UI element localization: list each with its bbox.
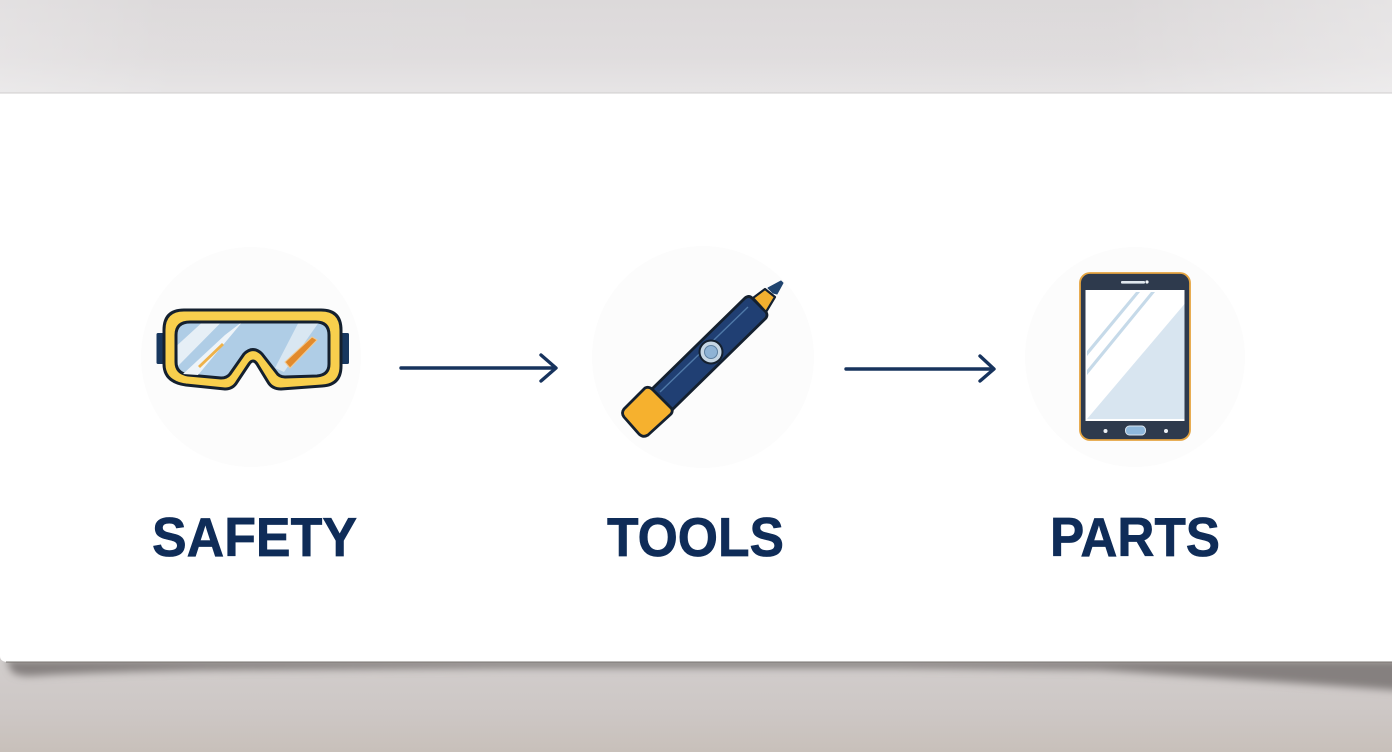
icon backdrop: safety xyxy=(141,247,361,467)
arrow: safety to tools xyxy=(401,355,556,381)
arrow: tools to parts xyxy=(846,356,994,381)
panel: white card xyxy=(0,93,1392,662)
label: SAFETY: SAFETY xyxy=(152,506,357,568)
label: PARTS: PARTS xyxy=(1050,506,1220,568)
label: TOOLS: TOOLS xyxy=(607,506,784,568)
card shadow xyxy=(6,660,1392,694)
panel: tools step xyxy=(592,246,814,568)
icon backdrop: parts xyxy=(1025,247,1245,467)
panel: safety step xyxy=(141,247,361,568)
icon: voltage tester pen xyxy=(622,281,783,436)
icon backdrop: tools xyxy=(592,246,814,468)
icon: tablet xyxy=(1080,273,1190,440)
background: upper wall xyxy=(0,0,1392,95)
icon: safety goggles xyxy=(156,310,349,389)
panel: parts step xyxy=(1025,247,1245,568)
background: lower surface xyxy=(0,655,1392,752)
